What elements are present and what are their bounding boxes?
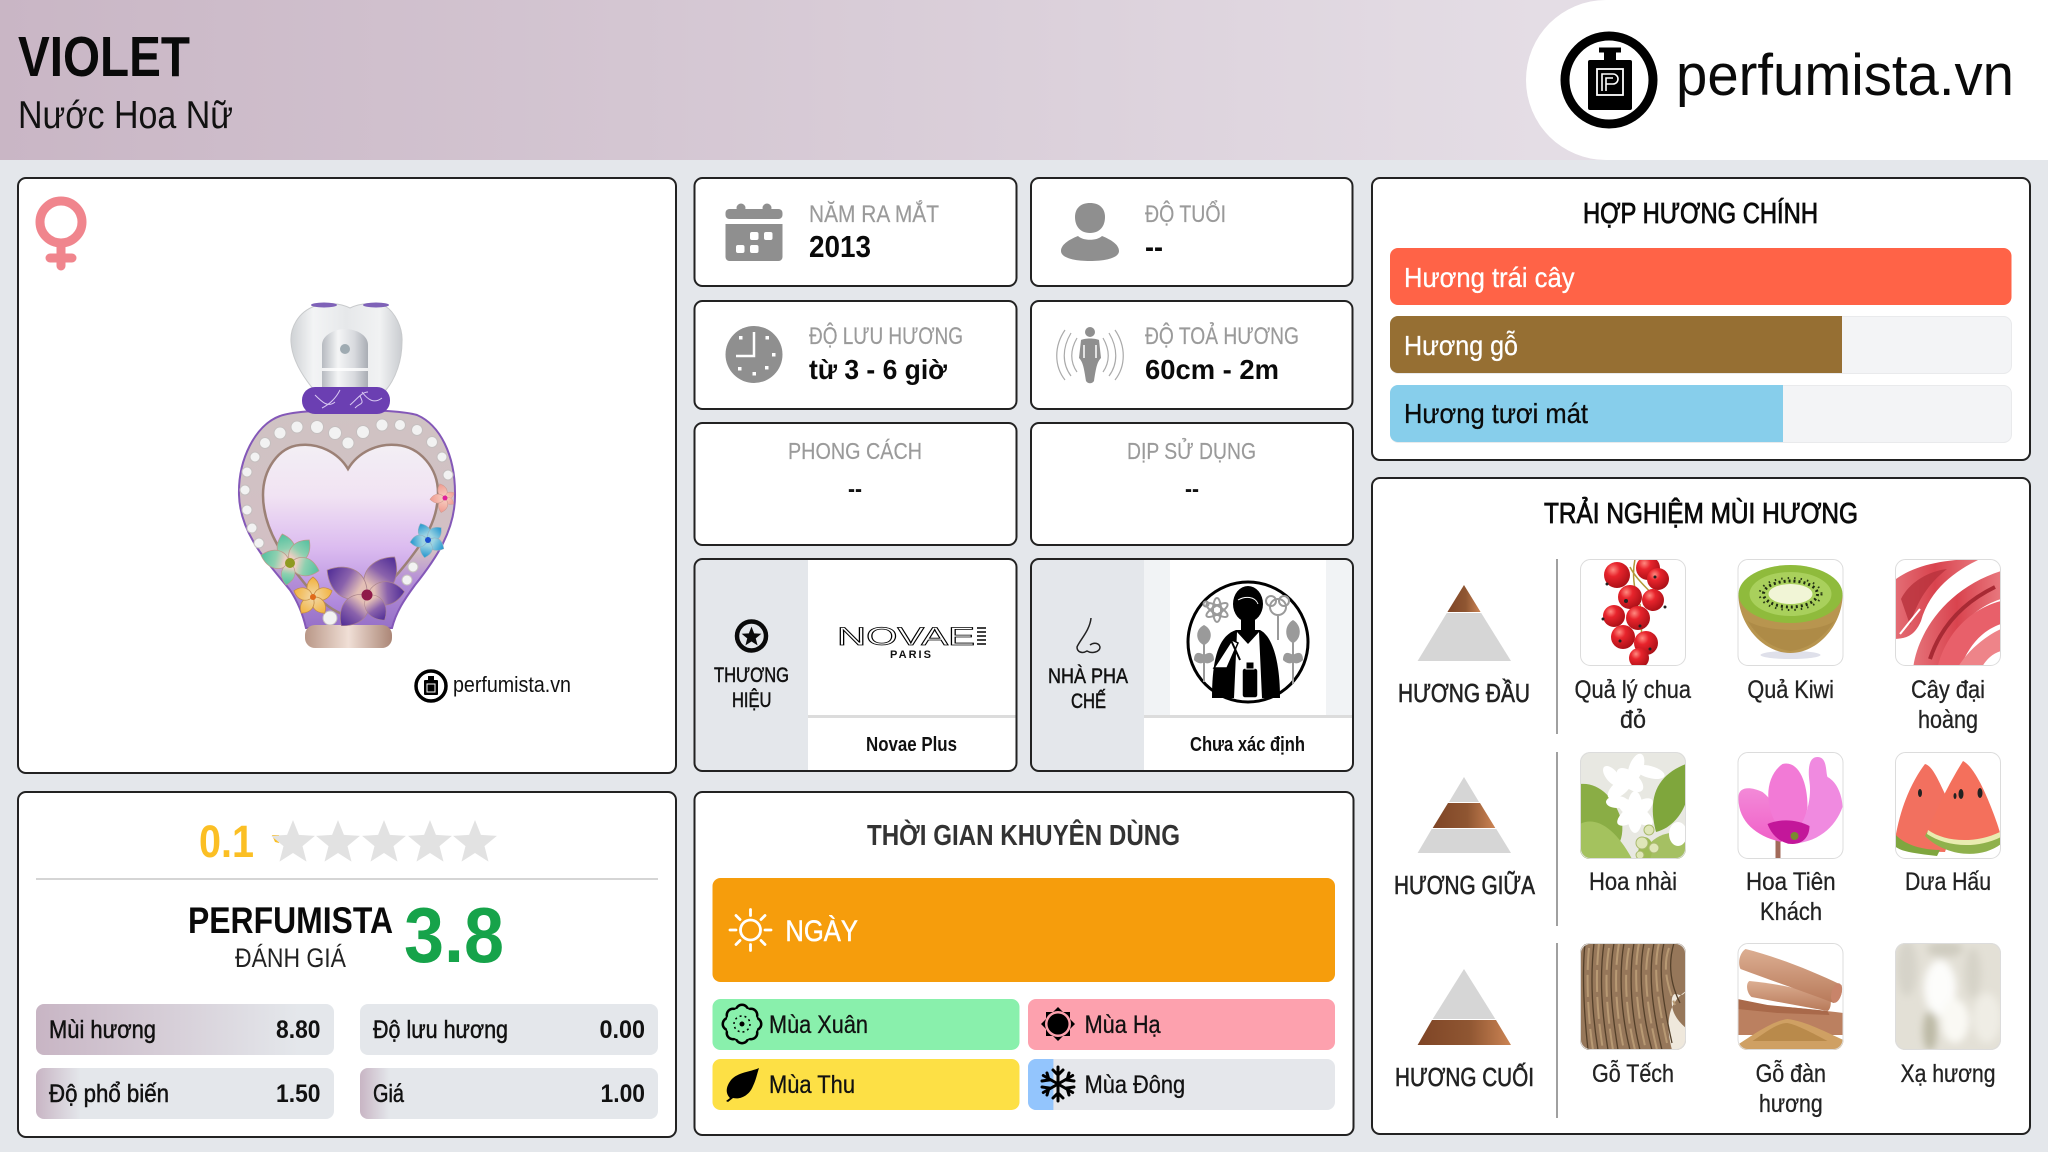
panel: rating	[18, 792, 676, 1137]
flower: pink	[430, 482, 456, 514]
star rating	[271, 820, 497, 862]
note: jasmine	[1580, 752, 1687, 896]
label: occasion: DỊP SỬ DỤNG	[1127, 436, 1256, 464]
brand name: Novae Plus	[866, 734, 957, 756]
label: brand: HIỆU	[732, 689, 772, 712]
card: style	[694, 423, 1016, 545]
value: occasion: --	[1185, 476, 1199, 503]
note: watermelon: Dưa Hấu	[1905, 868, 1991, 896]
note: jasmine: Hoa nhài	[1589, 868, 1677, 896]
heading: scent experience: TRẢI NGHIỆM MÙI HƯƠNG	[1544, 497, 1858, 530]
note: kiwi	[1738, 559, 1844, 704]
logo: Novae Paris: PARIS	[890, 649, 931, 661]
card: age	[1031, 178, 1352, 286]
logo: Novae Paris	[837, 623, 986, 661]
score bar: price: 1.00	[600, 1080, 645, 1108]
icon: snowflake	[1042, 1067, 1074, 1101]
perfume bottle illustration	[239, 302, 456, 648]
flower: green	[259, 532, 321, 586]
accord bar: woody	[1390, 316, 2012, 374]
score bar: popularity	[36, 1068, 334, 1119]
flower: purple	[319, 548, 406, 634]
note: cyclamen: Khách	[1760, 898, 1822, 926]
label: base notes: HƯƠNG CUỐI	[1395, 1062, 1534, 1092]
note: musk	[1895, 940, 2001, 1088]
label: heart notes: HƯƠNG GIỮA	[1394, 871, 1535, 900]
accord bar: fruity	[1390, 248, 2012, 305]
note: cyclamen: Hoa Tiên	[1746, 868, 1836, 896]
icon: person	[1061, 203, 1119, 261]
note: rhubarb: Cây đại	[1911, 676, 1985, 704]
icon: sun	[730, 910, 771, 950]
score bar: price	[360, 1068, 658, 1119]
icon: person with scent waves	[1057, 327, 1123, 383]
heading: recommended time: THỜI GIAN KHUYÊN DÙNG	[867, 820, 1180, 852]
panel: main accords	[1372, 178, 2030, 460]
bar: day	[712, 878, 1335, 982]
accord bar: fruity: Hương trái cây	[1404, 262, 1575, 293]
card: brand	[694, 559, 1016, 771]
icon: female symbol	[40, 201, 82, 266]
illustration: perfumer portrait	[1188, 582, 1308, 702]
accord bar: fresh: Hương tươi mát	[1404, 398, 1588, 429]
label: perfumer: CHẾ	[1071, 690, 1106, 713]
label: perfumer: NHÀ PHA	[1048, 665, 1128, 688]
accord bar: woody: Hương gỗ	[1404, 330, 1518, 361]
note: teak wood: Gỗ Tếch	[1592, 1059, 1674, 1088]
bar: summer: Mùa Hạ	[1085, 1011, 1161, 1039]
subheading: rating: ĐÁNH GIÁ	[235, 943, 346, 973]
bar: summer	[1028, 999, 1335, 1050]
flower: blue	[409, 521, 447, 559]
note: sandalwood	[1738, 943, 1844, 1118]
perfumer name: Chưa xác định	[1190, 734, 1305, 756]
card: projection	[1031, 301, 1352, 409]
card: longevity	[694, 301, 1016, 409]
header band	[0, 0, 2048, 160]
pyramid: heart notes	[1418, 777, 1511, 853]
score bar: scent	[36, 1004, 334, 1055]
heading: Perfumista: PERFUMISTA	[188, 900, 393, 941]
pyramid: top notes	[1418, 585, 1511, 661]
note: sandalwood: Gỗ đàn	[1756, 1059, 1826, 1088]
icon: clock	[726, 326, 782, 383]
label: projection: ĐỘ TOẢ HƯƠNG	[1145, 321, 1299, 350]
title: perfume name: VIOLET	[18, 25, 190, 89]
icon: star badge	[737, 622, 766, 650]
score: 3.8: 3.8	[404, 891, 504, 979]
value: release year: 2013	[809, 230, 871, 264]
bar: spring	[712, 999, 1020, 1050]
logo: Novae Paris: NOVAE	[837, 623, 975, 651]
icon: flower	[722, 1004, 762, 1044]
score bar: longevity	[360, 1004, 658, 1055]
label: longevity: ĐỘ LƯU HƯƠNG	[809, 322, 963, 350]
watermark logo	[416, 671, 571, 701]
note: kiwi: Quả Kiwi	[1747, 676, 1834, 704]
label: top notes: HƯƠNG ĐẦU	[1398, 679, 1530, 708]
score bar: longevity: 0.00	[600, 1016, 645, 1044]
note: red currant: đỏ	[1620, 706, 1646, 734]
accord bar: fresh	[1390, 385, 2012, 442]
note: rhubarb: hoàng	[1918, 706, 1978, 734]
heading: main accords: HỢP HƯƠNG CHÍNH	[1583, 198, 1818, 230]
value: projection: 60cm - 2m	[1145, 354, 1279, 385]
note: sandalwood: hương	[1759, 1090, 1823, 1118]
bar: winter: Mùa Đông	[1085, 1071, 1185, 1099]
card: occasion	[1031, 423, 1353, 545]
card: perfumer	[1031, 559, 1353, 771]
icon: leaf	[726, 1068, 759, 1102]
label: brand: THƯƠNG	[714, 664, 789, 687]
watermark logo: perfumista.vn	[453, 672, 571, 697]
bar: spring: Mùa Xuân	[769, 1011, 868, 1039]
note: watermelon	[1895, 752, 2001, 896]
panel: scent experience	[1372, 478, 2030, 1134]
note: rhubarb	[1890, 559, 2001, 734]
bar: winter	[1028, 1059, 1335, 1110]
logo: perfumista.vn: perfumista.vn	[1676, 43, 2014, 108]
score bar: price: Giá	[373, 1080, 404, 1108]
label: age: ĐỘ TUỔI	[1145, 200, 1226, 228]
note: musk: Xạ hương	[1900, 1060, 1996, 1088]
panel: product image	[18, 178, 676, 773]
note: red currant: Quả lý chua	[1574, 676, 1691, 704]
score bar: popularity: Độ phổ biến	[49, 1080, 169, 1108]
value: style: --	[848, 476, 862, 503]
note: red currant	[1574, 556, 1691, 734]
panel: recommended time	[694, 792, 1354, 1135]
bar: autumn	[712, 1059, 1020, 1110]
icon: calendar	[726, 204, 782, 261]
value: age: --	[1145, 231, 1163, 264]
score bar: scent: Mùi hương	[49, 1016, 156, 1044]
score bar: longevity: Độ lưu hương	[373, 1016, 508, 1044]
card: release year	[694, 178, 1016, 286]
logo: perfumista.vn	[1526, 0, 2048, 160]
value: longevity: từ 3 - 6 giờ	[809, 354, 947, 385]
icon: summer sun	[1041, 1007, 1075, 1041]
label: release year: NĂM RA MẮT	[809, 200, 939, 228]
note: teak wood	[1580, 943, 1686, 1088]
label: brand	[714, 664, 789, 712]
flower: orange	[292, 577, 334, 617]
bar: autumn: Mùa Thu	[769, 1071, 855, 1099]
label: perfumer	[1048, 665, 1128, 713]
icon: nose	[1077, 618, 1100, 652]
score bar: scent: 8.80	[276, 1016, 320, 1044]
bar: day: NGÀY	[785, 915, 858, 948]
score bar: popularity: 1.50	[276, 1080, 320, 1108]
label: style: PHONG CÁCH	[788, 438, 922, 464]
note: cyclamen	[1738, 752, 1844, 926]
community rating value: 0.1	[199, 816, 254, 867]
pyramid: base notes	[1418, 969, 1511, 1045]
subtitle: category: Nước Hoa Nữ	[18, 94, 233, 137]
